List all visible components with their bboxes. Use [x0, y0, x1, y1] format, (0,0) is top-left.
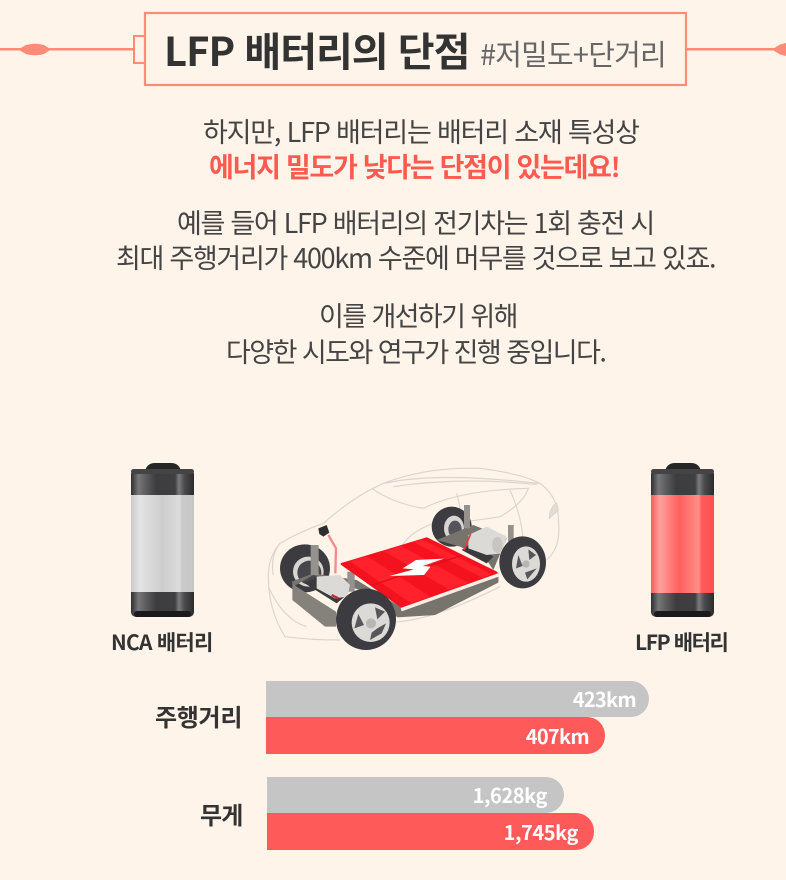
rear wheels: [280, 507, 472, 592]
highlighted text: 에너지 밀도가 낮다는 단점이 있는데요!: [209, 146, 619, 185]
header ornament line: [0, 12, 786, 86]
bar: LFP 1,745kg: 1,745kg: [504, 817, 578, 846]
car outline: [268, 468, 559, 640]
motors: [317, 527, 507, 598]
bar: LFP 407km: [266, 717, 605, 754]
bar: NCA 423km: 423km: [573, 684, 636, 713]
icon: NCA battery: [131, 463, 194, 617]
bar: NCA 1,628kg: [267, 777, 564, 813]
red cable and connector: [328, 535, 336, 573]
body text: improvement line 2: 다양한 시도와 연구가 진행 중입니다.: [226, 331, 605, 370]
body text: improvement: 이를 개선하기 위해: [319, 295, 517, 334]
illustration: electric car chassis with battery pack: [268, 468, 560, 650]
bar chart: driving range: [266, 681, 649, 754]
front wheels: [336, 536, 546, 650]
bar: LFP 1,745kg: [267, 813, 594, 850]
body text: driving range line 2: 최대 주행거리가 400km 수준에 머무를 것으로 보고 있죠.: [116, 237, 715, 276]
hashtag subtitle: #저밀도+단거리: [480, 32, 666, 74]
NCA battery label: NCA 배터리: [111, 627, 213, 657]
bar: LFP 407km: 407km: [526, 721, 589, 750]
bar chart: weight: [267, 777, 594, 850]
chart label: weight: 무게: [200, 796, 243, 831]
chart label: driving range: 주행거리: [155, 698, 242, 733]
LFP battery label: LFP 배터리: [635, 627, 727, 657]
chassis frame: [292, 505, 514, 627]
bar: NCA 1,628kg: 1,628kg: [473, 780, 547, 809]
bar: NCA 423km: [266, 681, 649, 717]
intro text: 하지만, LFP 배터리는 배터리 소재 특성상: [203, 111, 639, 150]
title: LFP 배터리의 단점: [164, 20, 469, 78]
body text: driving range: 예를 들어 LFP 배터리의 전기차는 1회 충전 시: [177, 202, 654, 241]
battery pack: [342, 538, 499, 617]
icon: LFP battery: [651, 463, 714, 617]
